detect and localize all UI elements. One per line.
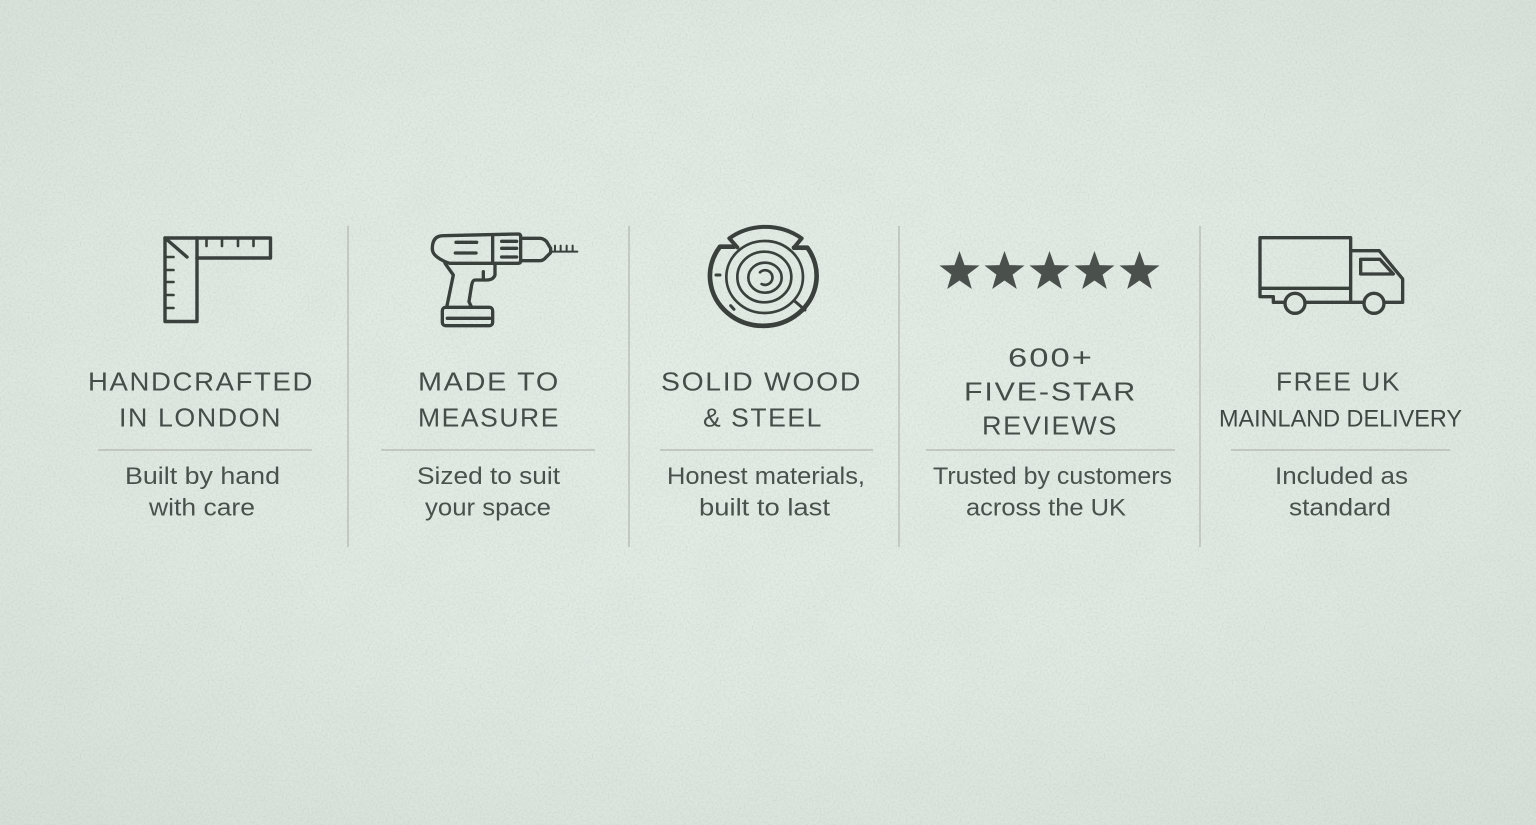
icon: delivery truck bbox=[1260, 238, 1403, 313]
heading: 600+ bbox=[1008, 344, 1094, 372]
heading: MAINLAND DELIVERY bbox=[1219, 406, 1462, 432]
heading: FIVE-STAR bbox=[964, 378, 1137, 406]
description: across the UK bbox=[966, 494, 1127, 522]
description: your space bbox=[425, 494, 551, 522]
description bbox=[667, 463, 865, 522]
panel: solid wood and steel bbox=[660, 227, 873, 522]
description bbox=[1275, 463, 1408, 522]
rule bbox=[660, 449, 873, 451]
description: Trusted by customers bbox=[933, 463, 1172, 490]
description bbox=[417, 463, 560, 522]
panel: made to measure bbox=[381, 234, 595, 522]
description: Included as bbox=[1275, 463, 1408, 490]
description: Built by hand bbox=[125, 463, 280, 490]
heading bbox=[88, 368, 314, 432]
description: Honest materials, bbox=[667, 463, 865, 490]
heading bbox=[418, 368, 560, 432]
heading bbox=[661, 368, 862, 432]
description bbox=[125, 463, 280, 522]
rule bbox=[926, 449, 1175, 451]
icon: five stars bbox=[940, 251, 1160, 289]
heading: HANDCRAFTED bbox=[88, 368, 314, 396]
heading bbox=[964, 344, 1137, 440]
heading: IN LONDON bbox=[119, 404, 282, 432]
description: built to last bbox=[699, 494, 830, 522]
rule bbox=[381, 449, 595, 451]
panel: five-star reviews bbox=[926, 251, 1175, 522]
panel: free UK delivery bbox=[1219, 238, 1462, 522]
description: standard bbox=[1289, 494, 1391, 522]
heading: MADE TO bbox=[418, 368, 560, 396]
heading: MEASURE bbox=[418, 404, 560, 432]
description: Sized to suit bbox=[417, 463, 560, 490]
rule bbox=[1231, 449, 1450, 451]
heading: FREE UK bbox=[1276, 368, 1401, 396]
description: with care bbox=[148, 494, 255, 522]
dividers bbox=[348, 226, 1200, 547]
panel: handcrafted in London bbox=[88, 238, 314, 522]
description bbox=[933, 463, 1172, 522]
heading: & STEEL bbox=[703, 404, 823, 432]
icon: log cross-section bbox=[710, 227, 817, 326]
rule bbox=[98, 449, 312, 451]
icon: set square ruler bbox=[165, 238, 270, 322]
heading: REVIEWS bbox=[982, 412, 1118, 440]
heading bbox=[1219, 368, 1462, 432]
heading: SOLID WOOD bbox=[661, 368, 862, 396]
icon: power drill bbox=[432, 234, 577, 326]
